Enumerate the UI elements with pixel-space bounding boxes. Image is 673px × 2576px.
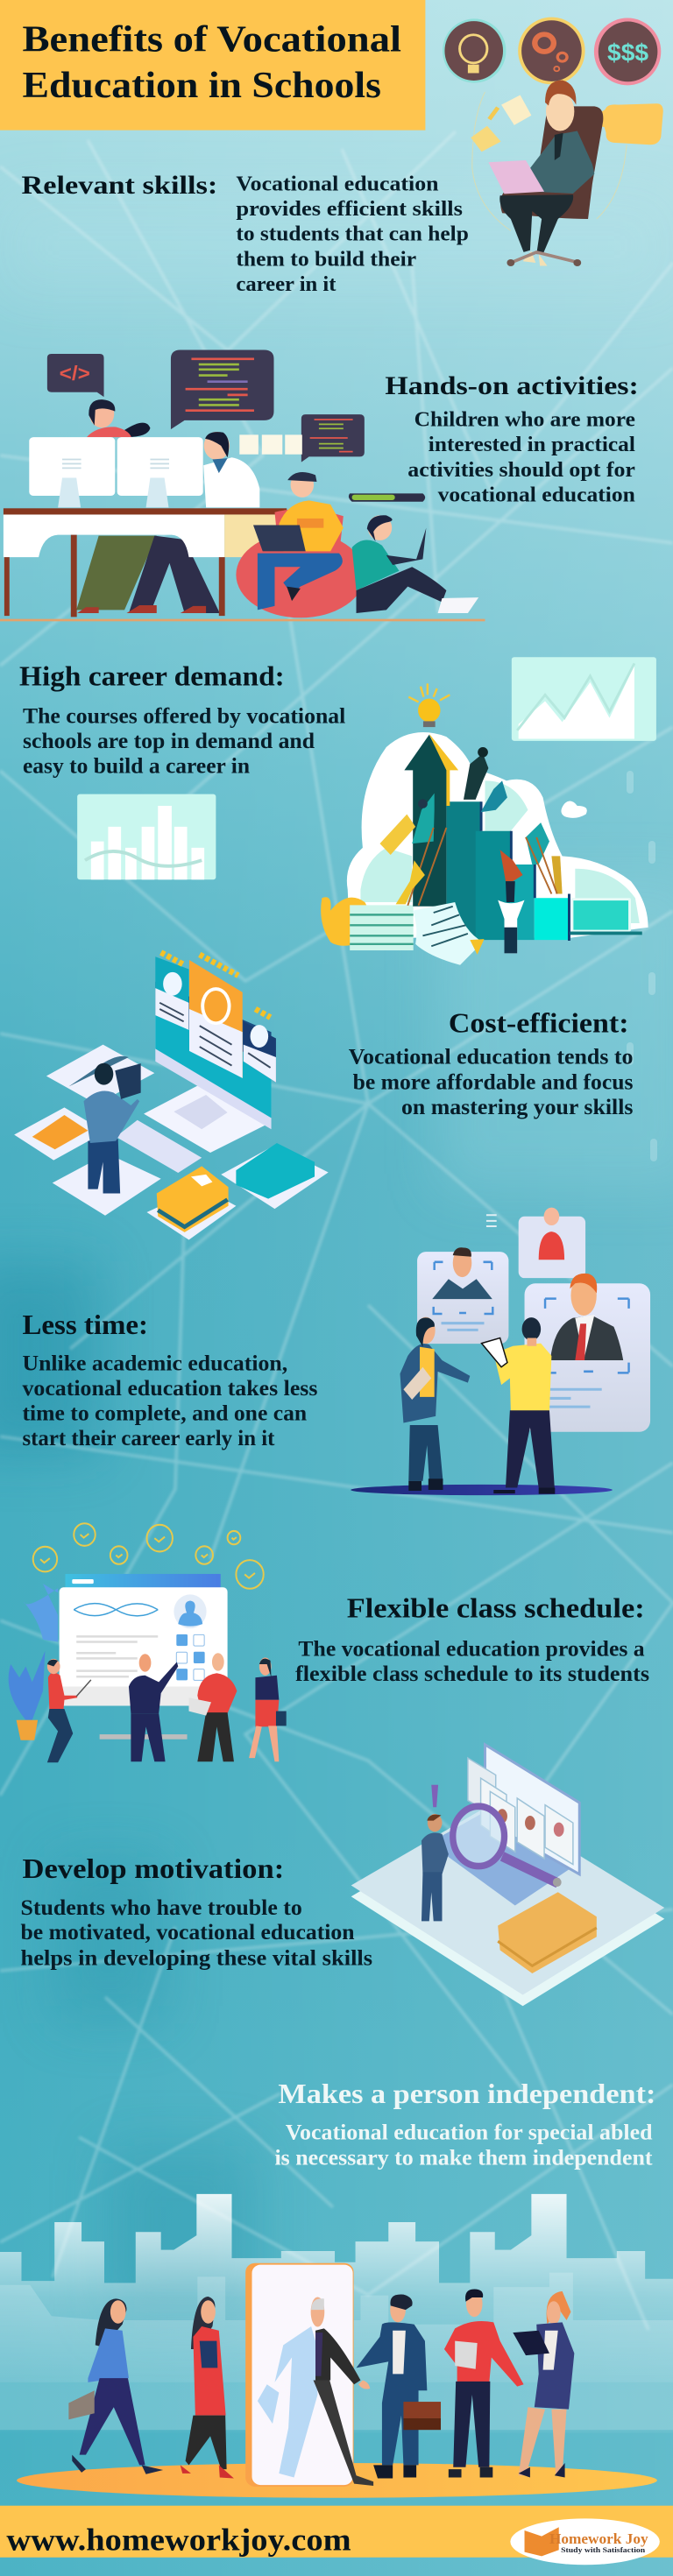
text: hands-on activities: activities should opt for	[407, 458, 635, 482]
text: cost-efficient: be more affordable and focus	[353, 1069, 633, 1094]
text: less time: start their career early in it	[22, 1427, 275, 1450]
text: relevant skills: career in it	[236, 272, 336, 296]
text: flexible class schedule	[295, 1637, 649, 1686]
text: makes a person independent: is necessary to make them independent	[274, 2145, 653, 2170]
text: flexible class schedule: flexible class schedule to its students	[295, 1662, 649, 1686]
text: cost-efficient: Vocational education tends to	[349, 1044, 633, 1069]
illustration: person stepping through door with colleagues	[17, 2263, 657, 2498]
heading: flexible class schedule: Flexible class schedule:	[347, 1592, 645, 1624]
text: high career demand: easy to build a career in	[23, 753, 251, 779]
text: hands-on activities	[407, 408, 635, 506]
heading: less time: Less time:	[22, 1309, 148, 1340]
heading: makes a person independent: Makes a person independent:	[278, 2078, 655, 2109]
chart: bar card	[77, 794, 216, 879]
text: develop motivation: Students who have trouble to	[21, 1896, 302, 1920]
logo: Homework Joy: Study with Satisfaction	[561, 2545, 645, 2554]
logo: Homework Joy: Homework Joy	[549, 2530, 648, 2547]
section: title and relevant skills, hands-on activities	[0, 0, 663, 621]
illustration: recruiters and candidate cards	[351, 1208, 650, 1495]
illustration: candidate search on laptop	[351, 1745, 664, 2006]
illustration: career growth stairs	[321, 683, 648, 965]
chart: line card	[512, 657, 656, 741]
text: hands-on activities: vocational education	[438, 483, 635, 506]
text: less time: Unlike academic education,	[22, 1352, 287, 1375]
icon: gears badge	[518, 18, 585, 84]
text: less time	[22, 1352, 318, 1450]
icon: light bulb badge	[443, 18, 506, 83]
illustration: class schedule board with people	[9, 1523, 287, 1762]
icon: money badge	[594, 18, 661, 85]
heading: cost-efficient: Cost-efficient:	[449, 1008, 629, 1038]
footer band	[0, 2506, 673, 2558]
logo: Homework Joy	[510, 2518, 660, 2565]
text: makes a person independent: Vocational education for special abled	[286, 2120, 653, 2144]
text: cost-efficient: on mastering your skills	[401, 1094, 633, 1119]
title banner	[0, 0, 425, 131]
text: develop motivation continued: be motivated, vocational education	[21, 1920, 355, 1944]
text: high career demand	[23, 703, 345, 779]
section: makes a person independent and footer	[0, 1920, 673, 2565]
footer band: www.homeworkjoy.com	[6, 2522, 351, 2557]
icon: money badge: $$$	[607, 40, 648, 67]
text: develop motivation continued	[21, 1920, 372, 1970]
text: high career demand: schools are top in demand and	[23, 728, 315, 753]
illustration: isometric workstation	[14, 952, 329, 1240]
illustration: city skyline	[0, 2194, 673, 2506]
heading: develop motivation: Develop motivation:	[22, 1853, 284, 1884]
text: less time: vocational education takes less	[22, 1376, 318, 1401]
text: flexible class schedule: The vocational education provides a	[298, 1637, 645, 1661]
text: hands-on activities: Children who are more	[414, 408, 635, 431]
section: high career demand and cost-efficient	[14, 657, 656, 1240]
text: relevant skills: provides efficient skills	[236, 197, 463, 221]
heading: relevant skills: Relevant skills:	[21, 170, 217, 200]
illustration: team coding at desk	[0, 350, 485, 621]
title banner: Benefits of Vocational	[22, 18, 401, 60]
illustration: team coding at desk: </>	[60, 363, 90, 385]
text: cost-efficient	[349, 1044, 633, 1119]
illustration: businessman on chair	[471, 81, 663, 266]
text: relevant skills: to students that can help	[236, 222, 469, 245]
text: less time: time to complete, and one can	[22, 1401, 307, 1426]
text: develop motivation continued: helps in developing these vital skills	[21, 1945, 372, 1970]
text: relevant skills	[236, 172, 469, 296]
text: hands-on activities: interested in practical	[429, 433, 635, 456]
heading: hands-on activities: Hands-on activities:	[385, 371, 639, 400]
text: relevant skills: them to build their	[236, 248, 416, 271]
text: makes a person independent	[274, 2120, 653, 2170]
text: high career demand: The courses offered by vocational	[23, 703, 345, 728]
section: less time, flexible class schedule, develop motivation	[9, 1208, 664, 2006]
text: relevant skills: Vocational education	[236, 172, 439, 195]
heading: high career demand: High career demand:	[19, 661, 285, 691]
title banner: Education in Schools	[22, 65, 381, 106]
